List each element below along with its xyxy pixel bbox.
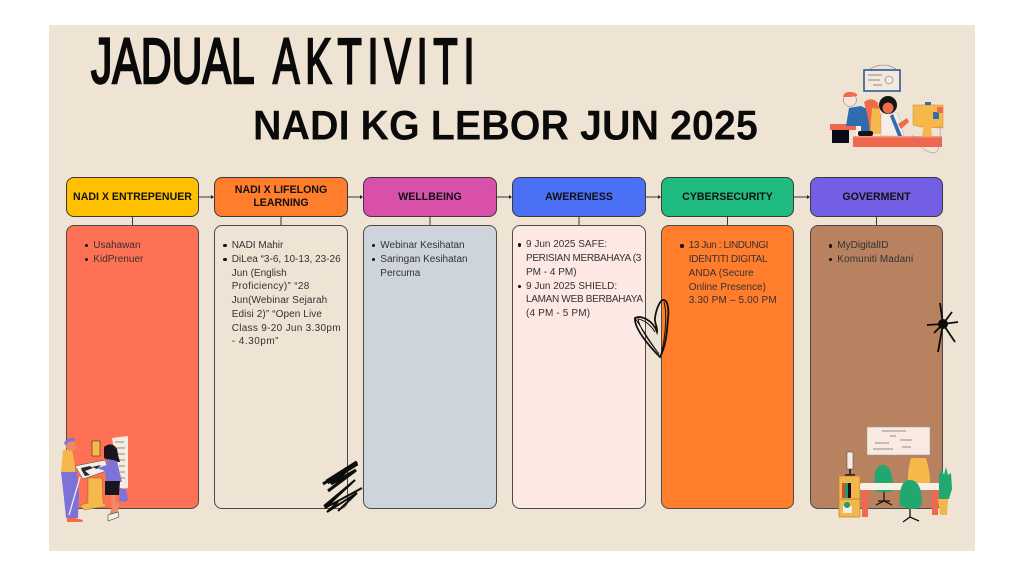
list: Awereness activities	[518, 239, 643, 319]
header: Nadi x Entrepenuer: NADI X ENTREPENUER	[73, 191, 192, 203]
list: Goverment activities	[829, 240, 913, 265]
icon: scribble	[322, 460, 362, 513]
illustration: office furniture	[838, 426, 952, 522]
list: Nadi x Entrepenuer activities: Usahawan	[93, 240, 141, 251]
list: Nadi x Entrepenuer activities: KidPrenuer	[93, 254, 143, 265]
list: Awereness activities: LAMAN WEB BERBAHAYA	[526, 294, 643, 305]
panel: Lifelong learning list	[214, 225, 348, 508]
header: Nadi x Entrepenuer	[66, 177, 199, 217]
list: Cybersecurity activities: Online Presence)	[689, 282, 766, 293]
list: Wellbeing activities: Saringan Kesihatan	[380, 254, 468, 265]
list: Awereness activities: PM - 4 PM)	[526, 267, 577, 278]
list: Cybersecurity activities: 13 Jun : LINDUNGI	[689, 240, 768, 251]
panel: Wellbeing list	[363, 225, 497, 508]
list: Lifelong learning activities: NADI Mahir	[232, 240, 283, 251]
list: Lifelong learning activities: Jun (English	[232, 268, 287, 278]
column 5: Cybersecurity	[661, 177, 794, 509]
title: Jadual Aktiviti	[90, 28, 475, 92]
list: Lifelong learning activities: - 4.30pm”	[232, 336, 279, 347]
list: Lifelong learning activities: Edisi 2)” “Open Live	[232, 309, 322, 320]
list: Lifelong learning activities	[223, 240, 341, 347]
list: Awereness activities: PERISIAN MERBAHAYA (3	[526, 253, 641, 264]
list: Lifelong learning activities: Jun(Webinar Sejarah	[232, 295, 327, 306]
list: Cybersecurity activities: IDENTITI DIGITAL	[689, 254, 767, 265]
list: Cybersecurity activities	[680, 240, 777, 306]
list: Wellbeing activities	[372, 240, 468, 278]
column 6: Goverment	[810, 177, 943, 509]
list: Lifelong learning activities: DiLea “3-6, 10-13, 23-26	[232, 254, 341, 265]
list: Lifelong learning activities: Class 9-20 Jun 3.30pm	[232, 322, 341, 334]
list: Lifelong learning activities: Proficiency)” “28	[232, 281, 310, 292]
illustration: office team	[830, 64, 944, 154]
header: Awereness	[512, 177, 646, 217]
header: Cybersecurity	[661, 177, 794, 217]
list: Goverment activities: MyDigitalID	[837, 240, 888, 251]
header: Nadi x Lifelong Learning	[214, 177, 348, 217]
panel: Cybersecurity list	[661, 225, 794, 508]
header: Nadi x Lifelong Learning: NADI X LIFELONG	[235, 184, 327, 196]
list: Cybersecurity activities: ANDA (Secure	[689, 268, 754, 279]
header: Cybersecurity: CYBERSECURITY	[682, 191, 773, 203]
header: Goverment	[810, 177, 943, 217]
header: Awereness: AWERENESS	[545, 191, 613, 203]
icon: ink splat	[926, 302, 958, 352]
panel: Awereness list	[512, 225, 646, 508]
list: Wellbeing activities: Percuma	[380, 268, 420, 278]
list: Awereness activities: 9 Jun 2025 SHIELD:	[526, 281, 617, 292]
list: Awereness activities: 9 Jun 2025 SAFE:	[526, 239, 607, 250]
list: Awereness activities: (4 PM - 5 PM)	[526, 308, 590, 319]
column 3: Wellbeing	[363, 177, 497, 509]
header: Wellbeing	[363, 177, 497, 217]
column 1: Nadi x Entrepenuer	[66, 177, 199, 509]
list: Nadi x Entrepenuer activities	[85, 240, 144, 265]
header: Nadi x Lifelong Learning: LEARNING	[253, 197, 309, 209]
illustration: two people at a map stand	[61, 436, 128, 522]
panel: Usahawan list	[66, 225, 199, 508]
panel: Goverment list	[810, 225, 943, 508]
list: Cybersecurity activities: 3.30 PM – 5.00 PM	[689, 295, 777, 306]
heading: NADI KG LEBOR JUN 2025: NADI KG LEBOR JUN 2025	[253, 103, 758, 149]
header: Wellbeing: WELLBEING	[398, 191, 462, 203]
column 4: Awereness	[512, 177, 646, 509]
icon: heart scribble	[634, 299, 670, 358]
column 2: Nadi x Lifelong Learning	[214, 177, 348, 509]
list: Wellbeing activities: Webinar Kesihatan	[380, 240, 465, 251]
list: Goverment activities: Komuniti Madani	[837, 254, 913, 265]
header: Goverment: GOVERMENT	[842, 191, 911, 203]
